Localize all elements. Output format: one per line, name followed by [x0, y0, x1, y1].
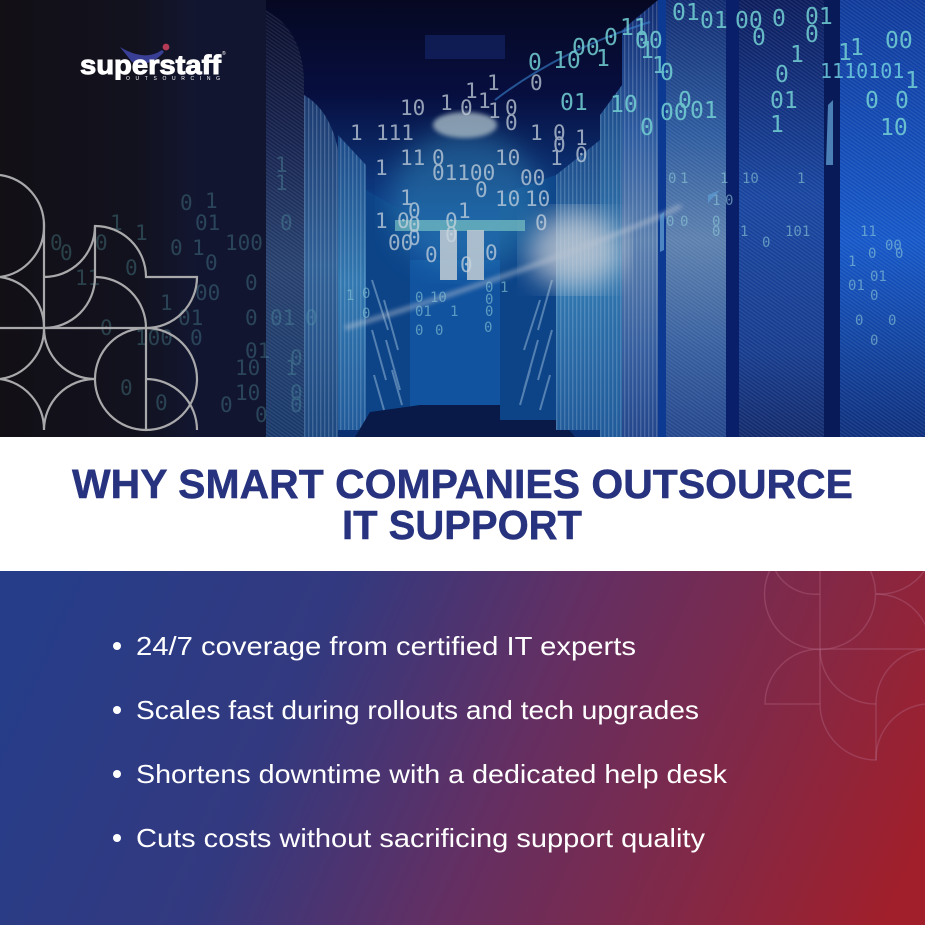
binary digits, bright: 00 — [635, 28, 663, 54]
hero photo: server room with binary overlay: 0 — [60, 241, 73, 265]
binary digits, bright: 10 — [553, 48, 581, 74]
hero photo: server room with binary overlay: 0 — [553, 121, 566, 145]
binary digits, bright: 00 — [735, 8, 763, 34]
bullet 1: 24/7 coverage from certified IT experts — [136, 631, 636, 661]
heading: IT SUPPORT — [342, 502, 582, 548]
hero photo: server room with binary overlay: 1 — [440, 91, 453, 115]
binary digits, bright: 01 — [672, 0, 700, 26]
hero photo: server room with binary overlay: 0 — [50, 231, 63, 255]
logo: superstaff outsourcing — [80, 44, 226, 82]
binary digits, bright: 10 — [880, 115, 908, 141]
hero photo: server room with binary overlay: 1 — [275, 171, 288, 195]
binary digits, bright: 0 — [865, 88, 879, 114]
logo: superstaff outsourcing: OUTSOURCING — [126, 76, 220, 82]
hero photo: server room with binary overlay: 01 — [415, 304, 432, 320]
panel: benefits on gradient — [0, 538, 925, 925]
hero photo: server room with binary overlay: 0 — [505, 96, 518, 120]
hero photo: server room with binary overlay: 0 — [460, 96, 473, 120]
rack handles — [660, 100, 833, 252]
binary digits, bright: 1 — [905, 68, 919, 94]
hero photo: server room with binary overlay: 0 — [485, 304, 493, 320]
hero photo: server room with binary overlay: 100 — [135, 326, 173, 350]
light glow and beams — [345, 22, 680, 328]
binary digits, bright: 0 — [772, 6, 786, 32]
bullet 4: Cuts costs without sacrificing support quality — [136, 823, 705, 853]
hero photo: server room with binary overlay: 1110101 — [820, 59, 904, 83]
binary digits, bright: 1 — [652, 53, 666, 79]
hero photo: server room with binary overlay: 11 — [75, 266, 100, 290]
binary digits, bright: 0 — [752, 25, 766, 51]
hero photo: server room with binary overlay: 0 — [505, 111, 518, 135]
hero photo: server room with binary overlay: 1 — [848, 254, 856, 270]
hero photo: server room with binary overlay: 1 — [350, 121, 363, 145]
hero photo: server room with binary overlay: 0 — [485, 241, 498, 265]
binary digits, bright: 01 — [700, 8, 728, 34]
bullet 3: Shortens downtime with a dedicated help desk — [136, 759, 728, 789]
hero photo: server room with binary overlay: 10 — [495, 146, 520, 170]
binary digits, bright: 1 — [770, 112, 784, 138]
hero photo: server room with binary overlay: 0 — [712, 224, 720, 240]
hero photo: server room with binary overlay: 0 — [290, 346, 303, 370]
binary digits, bright: 1 — [640, 38, 654, 64]
hero photo: server room with binary overlay: 1 — [487, 71, 500, 95]
heading — [72, 461, 853, 548]
title band — [0, 437, 925, 571]
hero photo: server room with binary overlay: 1 — [500, 280, 508, 296]
hero photo: server room with binary overlay: 0 — [445, 223, 458, 247]
hero photo: server room with binary overlay: 0 — [190, 326, 203, 350]
hero photo: server room with binary overlay: 10 — [525, 187, 550, 211]
hero photo: server room with binary overlay: 0 — [535, 211, 548, 235]
binary digits, bright: 0 — [678, 88, 692, 114]
hero photo: server room with binary overlay: 0 — [305, 306, 318, 330]
binary digits, bright: 0 — [528, 50, 542, 76]
hero photo: server room with binary overlay: 1 — [346, 288, 354, 304]
hero photo: server room with binary overlay: 1 — [285, 356, 298, 380]
hero photo: server room with binary overlay: 1 — [375, 156, 388, 180]
hero photo: server room with binary overlay: 1 — [488, 99, 501, 123]
hero photo: server room with binary overlay: 01 — [178, 306, 203, 330]
hero photo: server room with binary overlay: 0 — [120, 376, 133, 400]
binary digits, bright: 1 — [850, 35, 864, 61]
logo: superstaff outsourcing: superstaff — [80, 50, 222, 80]
hero photo: server room with binary overlay: 0 — [170, 236, 183, 260]
hero photo: server room with binary overlay: 0 — [95, 231, 108, 255]
hero photo: server room with binary overlay: 0 — [870, 333, 878, 349]
binary digits, bright: 0 — [775, 62, 789, 88]
hero photo: server room with binary overlay: 0 — [895, 246, 903, 262]
binary digits, bright: 00 — [885, 28, 913, 54]
binary digits, bright: 01 — [770, 88, 798, 114]
binary digits, bright: 1 — [838, 40, 852, 66]
hero photo: server room with binary overlay: 0 — [155, 391, 168, 415]
hero photo: server room with binary overlay: 01100 — [432, 161, 495, 185]
binary digits, bright: 0 — [640, 115, 654, 141]
hero photo: server room with binary overlay: 0 — [205, 251, 218, 275]
hero photo: server room with binary overlay: 1 — [575, 126, 588, 150]
hero photo: server room with binary overlay: 0 — [712, 214, 720, 230]
hero photo: server room with binary overlay: 0 — [408, 226, 421, 250]
hero photo: server room with binary overlay: 00 — [885, 238, 902, 254]
hero photo: server room with binary overlay: 0 — [435, 323, 443, 339]
hero photo: server room with binary overlay: 101 — [785, 224, 810, 240]
hero photo: server room with binary overlay: 0 — [762, 235, 770, 251]
hero photo: server room with binary overlay: 00 — [388, 231, 413, 255]
hero photo: server room with binary overlay: 01 — [270, 306, 295, 330]
hero photo: server room with binary overlay: 1 — [712, 193, 720, 209]
hero photo: server room with binary overlay: 1 — [550, 146, 563, 170]
hero photo: server room with binary overlay: 0 — [362, 286, 370, 302]
hero photo: server room with binary overlay: 0 — [432, 146, 445, 170]
binary digits, bright: 1 — [790, 42, 804, 68]
hero photo: server room with binary overlay: 0 — [668, 171, 676, 187]
hero photo: server room with binary overlay: 0 — [868, 246, 876, 262]
binary digits, bright: 00 — [572, 35, 600, 61]
hero photo: server room with binary overlay: 1 — [275, 153, 288, 177]
hero photo: server room with binary overlay: 0 — [408, 199, 421, 223]
binary digits, bright — [528, 0, 919, 141]
hero photo: server room with binary overlay: 0 — [870, 288, 878, 304]
hero photo: server room with binary overlay: 0 — [180, 191, 193, 215]
hero photo: server room with binary overlay: 1 — [720, 171, 728, 187]
hero photo: server room with binary overlay: 0 — [553, 133, 566, 157]
hero photo: server room with binary overlay: 01 — [245, 339, 270, 363]
decorative geometric line pattern, hero — [0, 175, 197, 430]
hero photo: server room with binary overlay: 11 — [400, 146, 425, 170]
hero photo: server room with binary overlay — [0, 0, 925, 437]
hero photo: server room with binary overlay: 0 — [397, 209, 410, 233]
hero photo: server room with binary overlay: 0 — [245, 271, 258, 295]
hero photo: server room with binary overlay: 1 — [530, 121, 543, 145]
hero photo: server room with binary overlay: 0 — [290, 381, 303, 405]
hero photo: server room with binary overlay: 0 — [888, 313, 896, 329]
binary digits, bright: 0 — [660, 60, 674, 86]
hero photo: server room with binary overlay: 00 — [520, 166, 545, 190]
heading: WHY SMART COMPANIES OUTSOURCE — [72, 461, 853, 507]
hero photo: server room with binary overlay: 1 — [375, 209, 388, 233]
hero photo: server room with binary overlay: 01 — [848, 278, 865, 294]
hero photo: server room with binary overlay: 100 — [225, 231, 263, 255]
hero photo: server room with binary overlay: 0 — [485, 292, 493, 308]
hero photo: server room with binary overlay: 111 — [376, 121, 414, 145]
bullet list — [113, 631, 728, 853]
binary digits, bright: 1 — [596, 46, 610, 72]
decorative geometric line pattern, panel — [764, 571, 925, 761]
hero photo: server room with binary overlay: 0 — [475, 178, 488, 202]
hero photo: server room with binary overlay: 0 — [408, 213, 421, 237]
binary digits, bright: 01 — [690, 98, 718, 124]
binary digits, bright: 00 — [660, 100, 688, 126]
hero photo: server room with binary overlay: 0 — [245, 306, 258, 330]
hero photo: server room with binary overlay: 10 — [235, 381, 260, 405]
hero photo: server room with binary overlay: 0 — [290, 393, 303, 417]
hero photo: server room with binary overlay: 1 — [110, 211, 123, 235]
hero photo: server room with binary overlay: 1 — [135, 221, 148, 245]
hero photo: server room with binary overlay: 0 — [425, 243, 438, 267]
binary digits, bright: 0 — [604, 25, 618, 51]
hero photo: server room with binary overlay: 0 — [445, 209, 458, 233]
hero photo: server room with binary overlay: 0 — [460, 253, 473, 277]
hero photo: server room with binary overlay: 1 — [797, 171, 805, 187]
hero photo: server room with binary overlay: 01 — [870, 269, 887, 285]
hero photo: server room with binary overlay: 0 — [255, 403, 268, 427]
binary digits, bright: 0 — [895, 88, 909, 114]
hero photo: server room with binary overlay: 0 — [280, 211, 293, 235]
hero photo: server room with binary overlay: 1 — [192, 236, 205, 260]
hero photo: server room with binary overlay: 10 — [235, 356, 260, 380]
hero photo: server room with binary overlay: 0 — [415, 290, 423, 306]
hero photo: server room with binary overlay: 10 — [430, 290, 447, 306]
hero photo: server room with binary overlay: 11 — [860, 224, 877, 240]
hero photo: server room with binary overlay: 1 — [478, 89, 491, 113]
hero photo: server room with binary overlay: 0 — [575, 143, 588, 167]
hero photo: server room with binary overlay: 1 — [160, 291, 173, 315]
hero photo: server room with binary overlay: 0 — [725, 193, 733, 209]
hero photo: server room with binary overlay: 01 — [195, 211, 220, 235]
binary digits, bright: 10 — [610, 92, 638, 118]
hero photo: server room with binary overlay: 1 — [450, 304, 458, 320]
hero photo: server room with binary overlay: 1 — [400, 186, 413, 210]
binary digits, bright: 11 — [620, 15, 648, 41]
hero photo: server room with binary overlay: 0 — [485, 280, 493, 296]
hero photo: server room with binary overlay: 1 — [680, 171, 688, 187]
hero photo: server room with binary overlay: 1 — [458, 199, 471, 223]
binary digits, bright: 01 — [805, 4, 833, 30]
binary digits, bright: 0 — [805, 22, 819, 48]
hero photo: server room with binary overlay: 0 — [680, 214, 688, 230]
hero photo: server room with binary overlay: 0 — [484, 320, 492, 336]
hero photo: server room with binary overlay: 0 — [855, 313, 863, 329]
light feathers on lower racks — [372, 280, 552, 410]
hero photo: server room with binary overlay: 1 — [465, 79, 478, 103]
hero photo: server room with binary overlay: 10 — [495, 187, 520, 211]
hero photo: server room with binary overlay: 1 — [740, 224, 748, 240]
hero photo: server room with binary overlay: 0 — [362, 306, 370, 322]
hero photo: server room with binary overlay: 00 — [195, 281, 220, 305]
hero photo: server room with binary overlay: 0 — [100, 316, 113, 340]
hero photo: server room with binary overlay: 0 — [666, 214, 674, 230]
binary digits, bright: 01 — [560, 90, 588, 116]
hero photo: server room with binary overlay: 10 — [742, 171, 759, 187]
hero photo: server room with binary overlay: 10 — [400, 96, 425, 120]
hero photo: server room with binary overlay: 0 — [530, 71, 543, 95]
hero photo: server room with binary overlay: 1 — [205, 189, 218, 213]
hero photo: server room with binary overlay: 0 — [415, 323, 423, 339]
logo: superstaff outsourcing: ® — [222, 50, 226, 57]
hero photo: server room with binary overlay: 0 — [125, 256, 138, 280]
bullet 2: Scales fast during rollouts and tech upgrades — [136, 695, 699, 725]
hero photo: server room with binary overlay: 0 — [220, 393, 233, 417]
